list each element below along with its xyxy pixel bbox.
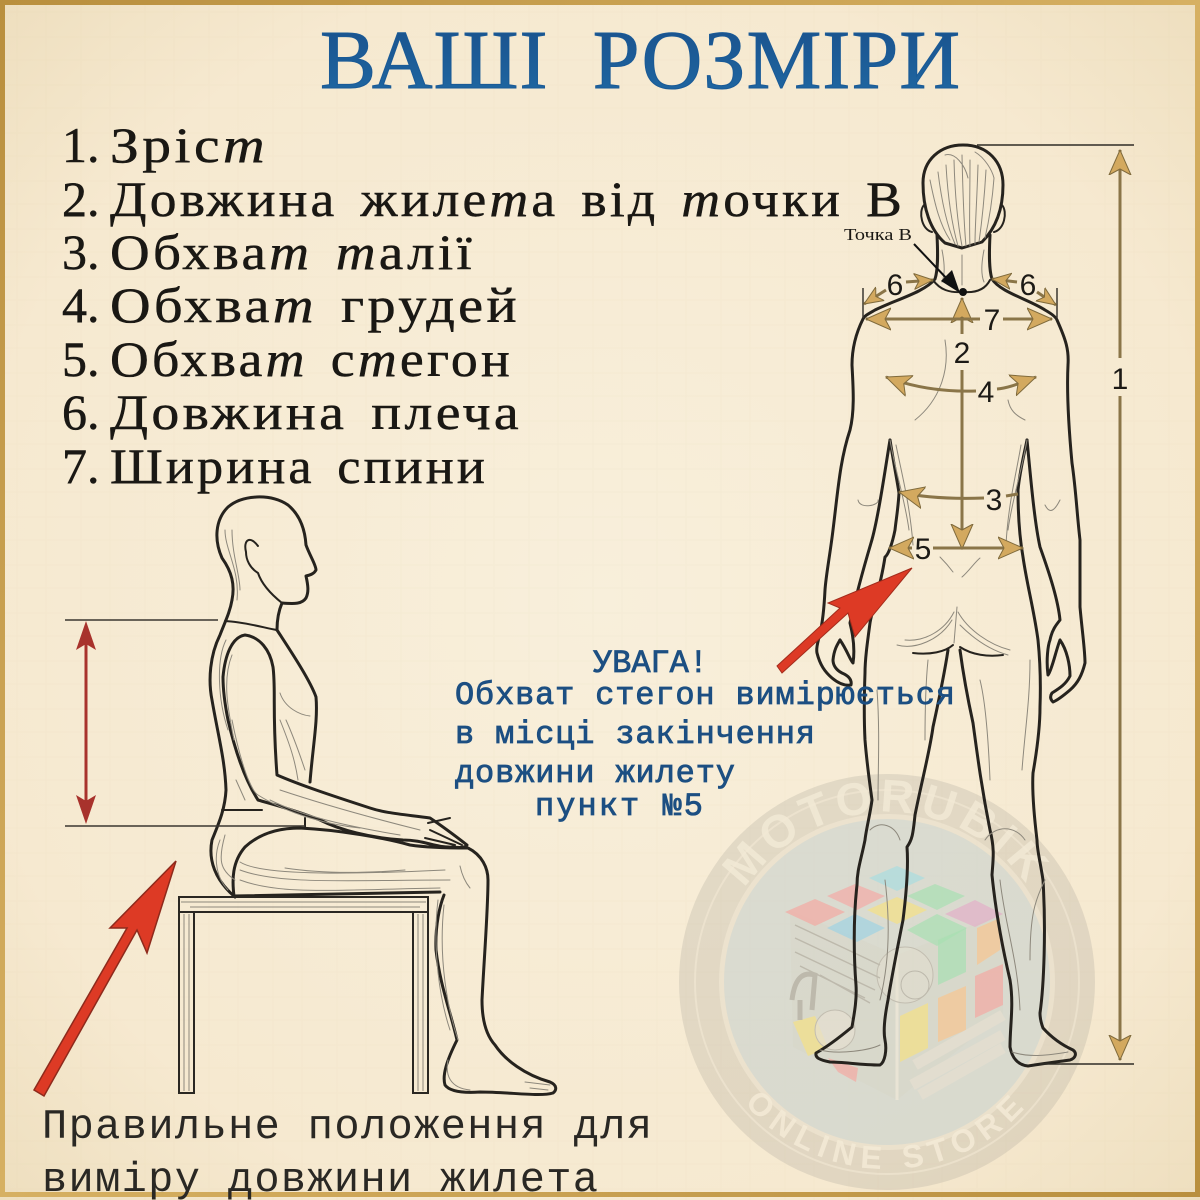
dark red double-headed arrow: [76, 621, 96, 824]
measurement list: [62, 117, 905, 494]
measurement list: 2.: [62, 171, 100, 227]
title: ВАШІ РОЗМІРИ: [320, 14, 960, 107]
caption: correct position: [42, 1103, 652, 1200]
watermark: Motorubik round logo: [679, 774, 1095, 1190]
measurement list: Довжина плеча: [110, 384, 522, 440]
dimension 2: length from point B: 2: [954, 337, 970, 370]
dimension 6: shoulder length, right: [992, 269, 1057, 318]
dimension 4: chest girth: 4: [978, 376, 994, 409]
measurement list: Обхва т талії: [110, 224, 475, 280]
measurement list: Обхват стегон: [110, 331, 513, 387]
measurement list: 3.: [62, 224, 100, 280]
measurement list: 1.: [62, 117, 100, 173]
watermark: Motorubik round logo: MOTORUBIK: [722, 780, 1050, 886]
attention note: в місці закінчення: [455, 716, 815, 753]
red arrow to hip: [777, 568, 912, 673]
dimension 5: hip girth: 5: [915, 533, 931, 566]
point B callout: Точка В: [844, 225, 912, 244]
dimension 6: shoulder length, left: 6: [887, 269, 903, 302]
dimension 5: hip girth: [889, 533, 1023, 566]
dimension 6: shoulder length, left: [863, 269, 933, 318]
chair: [179, 897, 428, 1093]
dimension 4: chest girth: [886, 376, 1036, 409]
attention note: довжини жилету: [455, 755, 735, 792]
dimension 7: back width: 7: [984, 304, 1000, 337]
back-length guide lines: [65, 620, 305, 826]
standing figure, back view: [816, 145, 1085, 1066]
measurement list: Довжина жиле та від точки В: [110, 171, 905, 227]
dimension 3: waist girth: [899, 484, 1018, 517]
dimension 6: shoulder length, right: 6: [1020, 269, 1036, 302]
measurement list: Ширина спини: [110, 438, 488, 494]
dimension 3: waist girth: 3: [986, 484, 1002, 517]
caption: correct position: Правильне положення для: [42, 1103, 652, 1151]
attention note: пункт №5: [535, 788, 703, 825]
measurement list: 4.: [62, 277, 100, 333]
measurement list: 6.: [62, 384, 100, 440]
measurement list: 5.: [62, 331, 100, 387]
point B callout: [844, 225, 967, 296]
watermark: Motorubik round logo: ONLINE STORE: [749, 1093, 1024, 1169]
measurement list: 7.: [62, 438, 100, 494]
attention note: [455, 645, 955, 825]
seated figure, side view: [210, 497, 556, 1095]
attention note: Обхват стегон вимірюється: [455, 677, 955, 714]
height dimension 1: 1: [1112, 363, 1128, 396]
collar neck line: [933, 280, 990, 292]
attention note: УВАГА!: [593, 645, 708, 682]
measurement list: Обхва т грудей: [110, 277, 520, 333]
red arrow to seat: [34, 861, 176, 1096]
measurement list: Зріс т: [110, 117, 268, 173]
